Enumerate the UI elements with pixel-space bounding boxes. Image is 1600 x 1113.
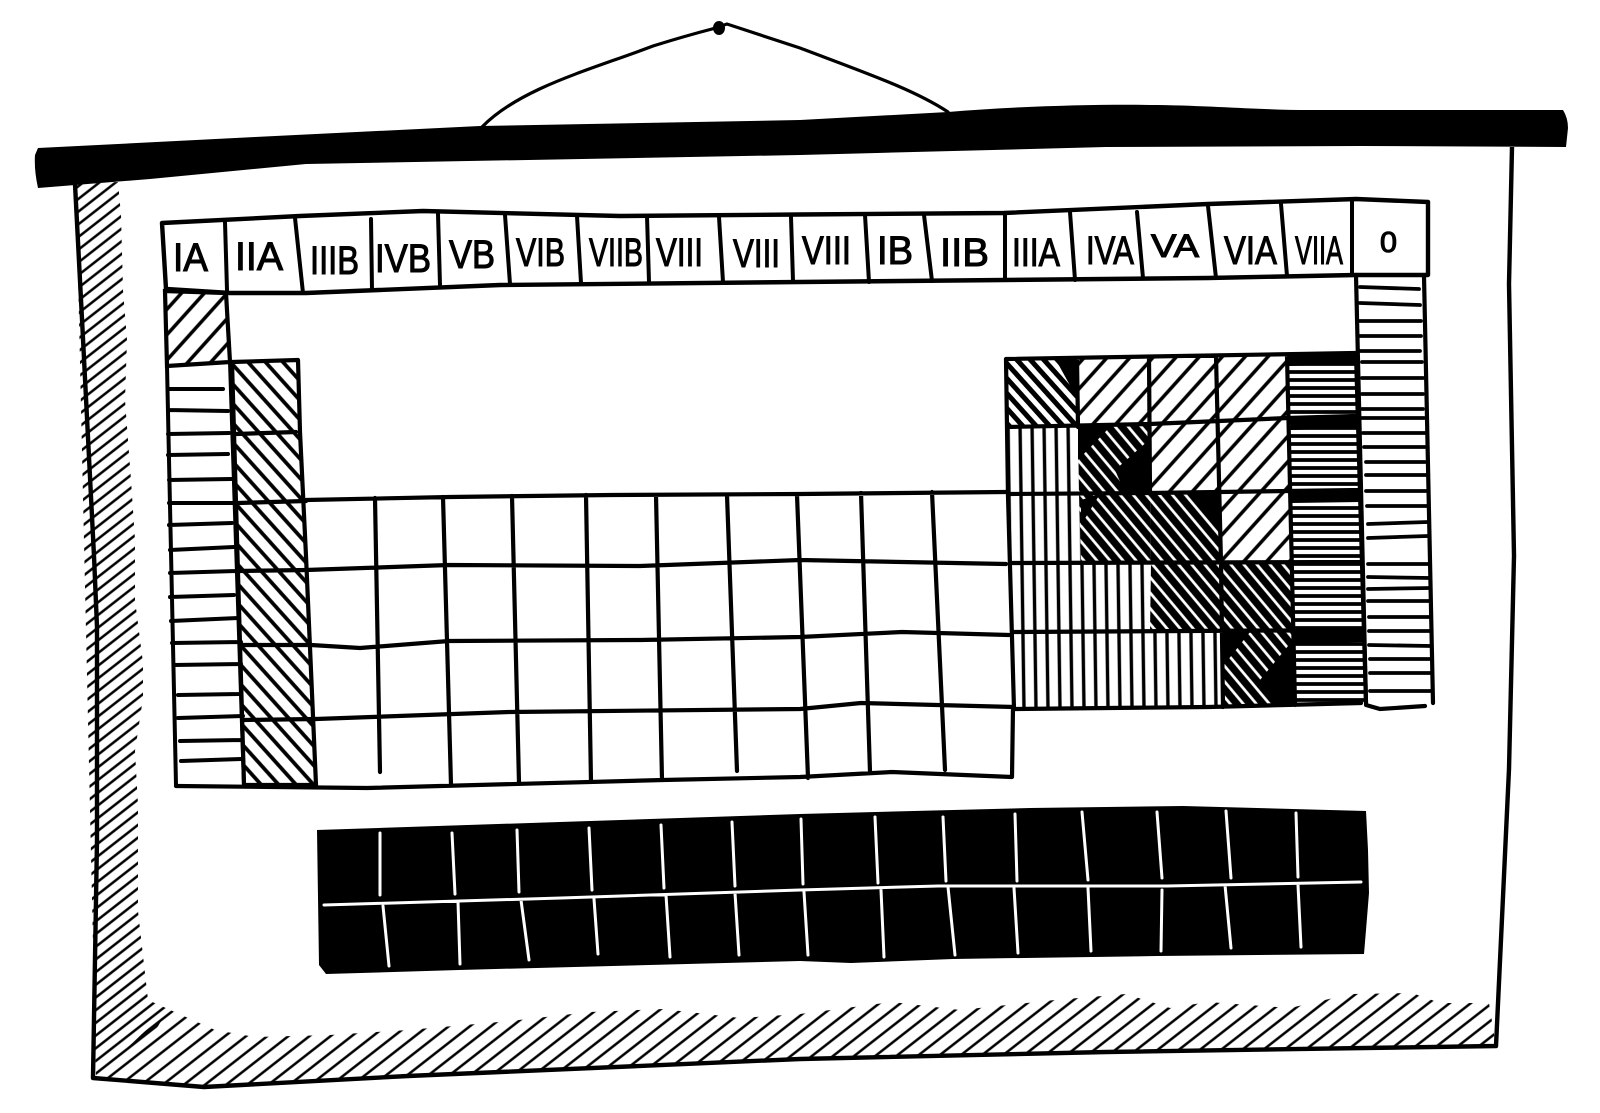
halogens column: [1287, 353, 1366, 705]
germanium cell: [1079, 493, 1151, 563]
antimony cell: [1150, 563, 1222, 632]
header cell dividers: [225, 201, 1352, 293]
header group labels: 0: [1380, 227, 1397, 259]
group header row: [162, 199, 1428, 293]
header group labels: VIA: [1224, 229, 1277, 273]
column IIA block: [232, 360, 316, 785]
white f-block grid lines: [324, 811, 1361, 966]
header group labels: VIII: [656, 231, 703, 275]
periodic table: [162, 199, 1433, 974]
noble gas column edges: [1356, 275, 1433, 709]
header row frame: [162, 199, 1428, 293]
gallium cell: [1008, 494, 1081, 563]
thallium, lead and bismuth cells: [1012, 632, 1223, 709]
header group labels: VIIB: [589, 231, 643, 275]
indium and tin cells: [1010, 563, 1151, 632]
row 4 cells: [1010, 563, 1293, 632]
polonium cell: [1222, 632, 1295, 707]
header group labels: VB: [449, 233, 495, 277]
header group labels: VIB: [516, 231, 565, 275]
hanging string with knot: [482, 21, 948, 127]
header group labels: IIA: [235, 235, 283, 279]
p-block cell grid lines: [1006, 353, 1366, 709]
header group labels: VIII: [733, 232, 780, 276]
oxygen cell: [1216, 355, 1288, 421]
sulfur cell: [1218, 418, 1290, 492]
row 5 cells: [1012, 632, 1295, 709]
header group labels: VA: [1151, 228, 1200, 264]
alkaline earth hatched cells: [232, 360, 316, 785]
header group labels: IIB: [940, 231, 989, 275]
header group labels: IIIA: [1012, 231, 1060, 275]
selenium cell: [1219, 491, 1292, 563]
black f-block panel: [317, 806, 1369, 974]
carbon cell: [1077, 357, 1149, 427]
header group labels: IA: [173, 236, 208, 280]
poster sheet outline: [75, 147, 1514, 1087]
noble gases striped column: [1356, 275, 1433, 709]
arsenic cell: [1150, 492, 1221, 563]
row 1 cells: [1007, 355, 1288, 427]
ink-saturated dark patches: [1056, 353, 1364, 705]
bottom shadow hatching: [96, 993, 1496, 1087]
tellurium cell: [1221, 563, 1293, 632]
aluminium cell: [1007, 427, 1079, 495]
alkaline earth cell dividers: [236, 432, 316, 720]
alkali metals striped column: [167, 362, 244, 785]
wooden hanging rod: [35, 105, 1568, 188]
header group labels: [173, 227, 1397, 283]
header group labels: IVB: [375, 237, 431, 281]
hydrogen cell: [165, 291, 230, 366]
column IA with hydrogen cell: [165, 291, 244, 785]
nitrogen cell: [1149, 356, 1218, 424]
noble gas stripes: [1360, 287, 1431, 691]
row 3 cells: [1008, 491, 1292, 563]
boron cell: [1007, 358, 1078, 427]
header group labels: IB: [877, 229, 913, 273]
header group labels: VIII: [802, 229, 851, 273]
p-block right section: [1006, 353, 1366, 709]
header group labels: IIIB: [310, 239, 359, 283]
phosphorus cell: [1149, 421, 1219, 493]
row 2 cells: [1007, 418, 1290, 495]
silicon cell: [1078, 424, 1150, 494]
header group labels: VIIA: [1295, 229, 1343, 273]
transition metals grid: [176, 492, 1014, 788]
left shadow hatching: [76, 182, 168, 1078]
f-block lanthanide and actinide rows: [317, 806, 1369, 974]
header group labels: IVA: [1086, 229, 1134, 273]
